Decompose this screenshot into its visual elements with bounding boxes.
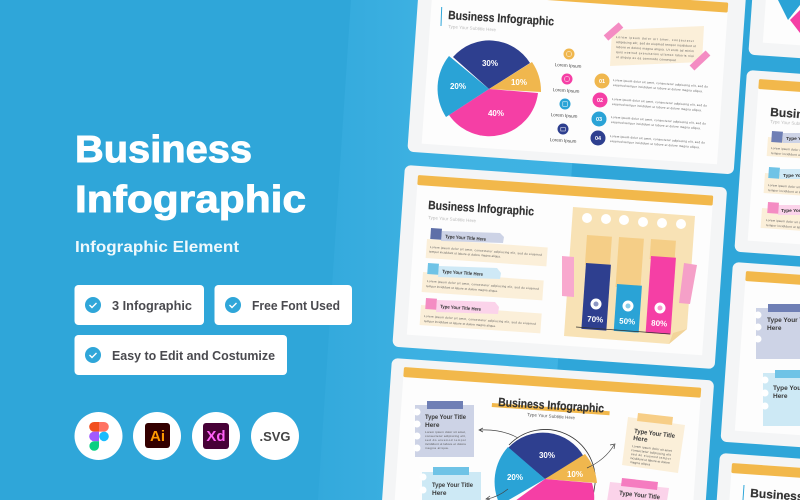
pie chart: 40%	[488, 109, 504, 118]
bar chart: 80%	[651, 318, 667, 329]
slide title: Business Infographic	[448, 8, 555, 28]
icon: SVG format	[251, 412, 299, 460]
note: beige: Here	[633, 435, 648, 444]
panel: slide with annotated pie	[379, 358, 714, 500]
pie chart: 30%	[482, 59, 498, 68]
note: pink	[605, 478, 669, 500]
text item 2	[422, 263, 544, 300]
feature badge: Free Font Used	[214, 285, 352, 325]
note: lavender: Here	[767, 325, 782, 332]
note: beige: incididunt ut labore et dolore	[630, 456, 670, 465]
text item 2: Type Your Title Here	[442, 269, 483, 278]
legend: Lorem Ipsum	[550, 137, 577, 144]
heading: product title	[75, 129, 306, 221]
feature badge: Free Font Used: Free Font Used	[252, 298, 340, 313]
numbered list: 03	[596, 117, 602, 123]
numbered list: Lorem ipsum dolor sit amet, consectetur adipiscing elit, sed do	[611, 115, 706, 126]
panel: partial slide top right	[748, 0, 800, 77]
panel: partial slide right middle	[734, 70, 800, 274]
feature badge: 3 Infographic: 3 Infographic	[112, 298, 192, 313]
panel: partial slide right lower	[720, 262, 800, 464]
text item 2: tempor incididunt ut labore et dolore magna aliqua.	[426, 284, 498, 293]
text item 1	[426, 228, 548, 266]
panel: slide with bar chart	[392, 165, 727, 369]
icon: Adobe Illustrator	[133, 412, 181, 460]
note: beige: magna aliqua	[630, 460, 651, 466]
text item 1: Type Your Title Here	[445, 234, 486, 243]
icon: SVG format: .SVG	[260, 429, 290, 444]
pie chart: 10%	[511, 78, 527, 87]
sticky note	[606, 25, 708, 68]
panel: partial slide bottom right	[707, 453, 800, 500]
bar chart	[562, 207, 697, 344]
note: lavender: incididunt ut labore et dolore	[425, 442, 466, 446]
note: lavender	[754, 304, 800, 359]
legend: Lorem Ipsum	[551, 112, 578, 119]
text items	[761, 131, 800, 232]
text item 1: Lorem ipsum dolor sit amet, consectetur adipiscing elit, sed do eiusmod	[430, 245, 542, 257]
numbered list: eiusmod tempor incididunt ut labore et dolore magna aliqua.	[613, 83, 703, 93]
numbered list: eiusmod tempor incididunt ut labore et dolore magna aliqua.	[610, 139, 700, 149]
note: lavender	[414, 401, 474, 457]
note: beige: Type Your Title	[634, 428, 676, 440]
bar chart: 70%	[587, 314, 603, 325]
numbered list: eiusmod tempor incididunt ut labore et dolore magna aliqua.	[612, 102, 702, 112]
title underline	[492, 403, 610, 415]
pie chart: 20%	[507, 473, 523, 482]
sticky note: ut aliquip ex ea commodo consequat	[616, 55, 676, 62]
icon: Figma	[74, 412, 122, 460]
note: lavender: Type Your Title	[425, 414, 466, 421]
panel: slide with pie chart	[407, 0, 746, 174]
slide title: Business Infographic	[428, 198, 535, 218]
legend	[550, 48, 582, 144]
note: light blue	[420, 467, 481, 500]
numbered list: 04	[595, 136, 602, 142]
note: lavender: magna aliqua.	[425, 446, 449, 450]
subheading: Infographic Element	[75, 239, 240, 256]
sticky note: labore et dolore magna aliqua. Ut enim ad minim	[616, 45, 695, 53]
note: lavender: consectetur adipiscing elit,	[425, 434, 466, 438]
bar chart: 50%	[619, 316, 635, 327]
note: light blue: Type Your Title	[432, 482, 473, 489]
feature badge: 3 Infographic	[74, 285, 204, 325]
icon: Adobe XD	[192, 412, 240, 460]
pie chart: 10%	[567, 470, 583, 479]
heading: product title: Infographic	[75, 179, 306, 221]
note: beige: sed do eiusmod tempor	[631, 452, 671, 461]
feature badge: Easy to Edit: Easy to Edit and Costumize	[112, 348, 275, 363]
slide subtitle: Type Your Subtitle Here	[527, 412, 576, 420]
numbered list: 02	[597, 98, 603, 104]
numbered list: Lorem ipsum dolor sit amet, consectetur adipiscing elit, sed do	[612, 97, 707, 108]
slide subtitle: Type Your Subtitle Here	[428, 215, 477, 223]
pie chart	[438, 40, 541, 136]
numbered list	[590, 74, 708, 149]
note: light blue: Here	[432, 490, 447, 497]
legend: Lorem Ipsum	[553, 87, 580, 94]
note: beige	[622, 413, 685, 473]
text item 3: tempor incididunt ut labore et dolore magna aliqua.	[424, 319, 496, 328]
feature badge: Easy to Edit	[74, 335, 287, 375]
numbered list: eiusmod tempor incididunt ut labore et dolore magna aliqua.	[611, 120, 701, 130]
note: lavender: sed do eiusmod tempor	[425, 438, 466, 442]
sticky note: quis nostrud exercitation ullamco laboris nisi	[616, 50, 694, 58]
arrows	[479, 428, 615, 500]
note: beige: consectetur adipiscing elit	[631, 448, 671, 457]
icon: Adobe XD: Xd	[206, 428, 226, 445]
text item 3: Type Your Title Here	[440, 304, 481, 313]
heading: product title: Business	[75, 129, 252, 171]
note: light blue	[762, 370, 800, 426]
text item 2: Lorem ipsum dolor sit amet, consectetur adipiscing elit, sed do eiusmod	[427, 279, 539, 291]
pie chart: 20%	[450, 82, 466, 91]
pie chart: 30%	[539, 451, 555, 460]
legend: Lorem Ipsum	[555, 62, 582, 69]
note: lavender: Here	[425, 422, 440, 429]
note: light blue: Here	[773, 393, 788, 400]
numbered list: Lorem ipsum dolor sit amet, consectetur adipiscing elit, sed do	[610, 134, 705, 145]
text item 3	[420, 298, 542, 333]
text item 1: tempor incididunt ut labore et dolore magna aliqua.	[429, 250, 501, 259]
sticky note: Lorem ipsum dolor sit amet, consectetur	[616, 35, 694, 43]
icon: Adobe Illustrator: Ai	[150, 428, 165, 445]
text item 3: Lorem ipsum dolor sit amet, consectetur adipiscing elit, sed do eiusmod	[424, 314, 536, 326]
slide title: Business Infographic	[498, 395, 605, 415]
slide subtitle: Type Your Subtitle Here	[448, 24, 497, 32]
note: beige: Lorem ipsum dolor sit amet	[632, 444, 672, 453]
numbered list: 01	[599, 79, 605, 85]
numbered list: Lorem ipsum dolor sit amet, consectetur adipiscing elit, sed do	[613, 78, 708, 89]
sticky note: adipiscing elit, sed do eiusmod tempor incididunt ut	[616, 40, 696, 48]
pie chart	[495, 429, 597, 500]
note: lavender: Lorem ipsum dolor sit amet,	[425, 430, 466, 434]
